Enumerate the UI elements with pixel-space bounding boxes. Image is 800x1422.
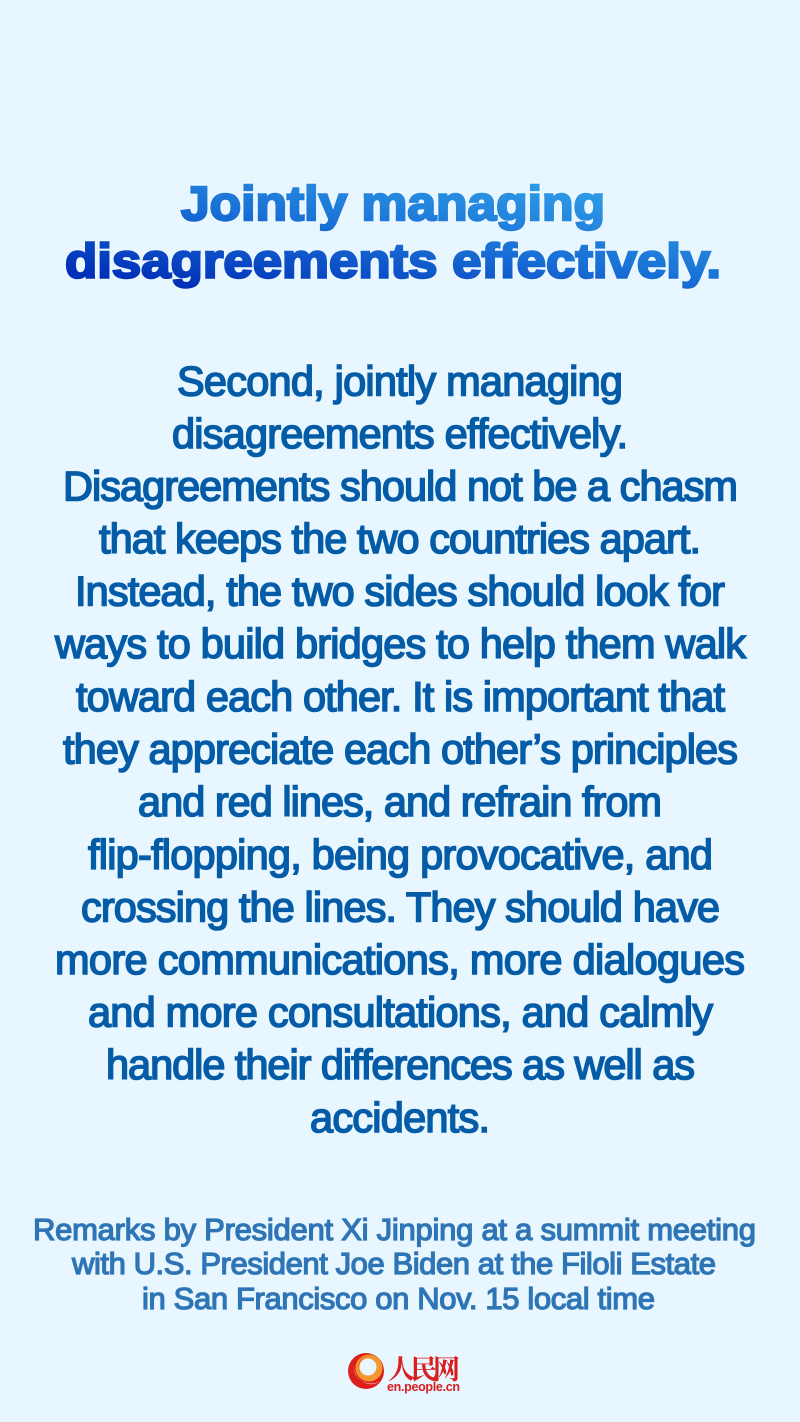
body text: ways to build bridges to help them walk xyxy=(54,620,746,667)
logo: People's Daily Online xyxy=(348,1353,460,1394)
body text: that keeps the two countries apart. xyxy=(99,515,701,562)
icon: swirl emblem xyxy=(348,1353,384,1389)
body text: flip-flopping, being provocative, and xyxy=(88,831,713,878)
source attribution xyxy=(33,1212,756,1316)
body text: accidents. xyxy=(310,1094,490,1141)
body text: and red lines, and refrain from xyxy=(138,778,662,825)
title xyxy=(65,177,721,288)
body text xyxy=(54,358,746,1141)
logo url: en.people.cn xyxy=(387,1380,460,1394)
body text: and more consultations, and calmly xyxy=(88,988,713,1036)
body text: more communications, more dialogues xyxy=(55,936,745,983)
body text: Instead, the two sides should look for xyxy=(75,568,725,614)
body text: Second, jointly managing xyxy=(177,358,623,404)
body text: they appreciate each other’s principles xyxy=(63,726,738,772)
body text: crossing the lines. They should have xyxy=(81,884,720,930)
body text: handle their differences as well as xyxy=(106,1041,695,1088)
source attribution: Remarks by President Xi Jinping at a summit meeting xyxy=(33,1212,756,1247)
body text: disagreements effectively. xyxy=(172,410,628,457)
source attribution: with U.S. President Joe Biden at the Filoli Estate xyxy=(71,1246,716,1281)
body text: toward each other. It is important that xyxy=(76,673,725,720)
logo wordmark: 人民网 xyxy=(388,1355,460,1385)
body text: Disagreements should not be a chasm xyxy=(63,462,738,510)
source attribution: in San Francisco on Nov. 15 local time xyxy=(142,1281,655,1316)
title: disagreements effectively. xyxy=(65,234,721,288)
title: Jointly managing xyxy=(181,177,605,231)
